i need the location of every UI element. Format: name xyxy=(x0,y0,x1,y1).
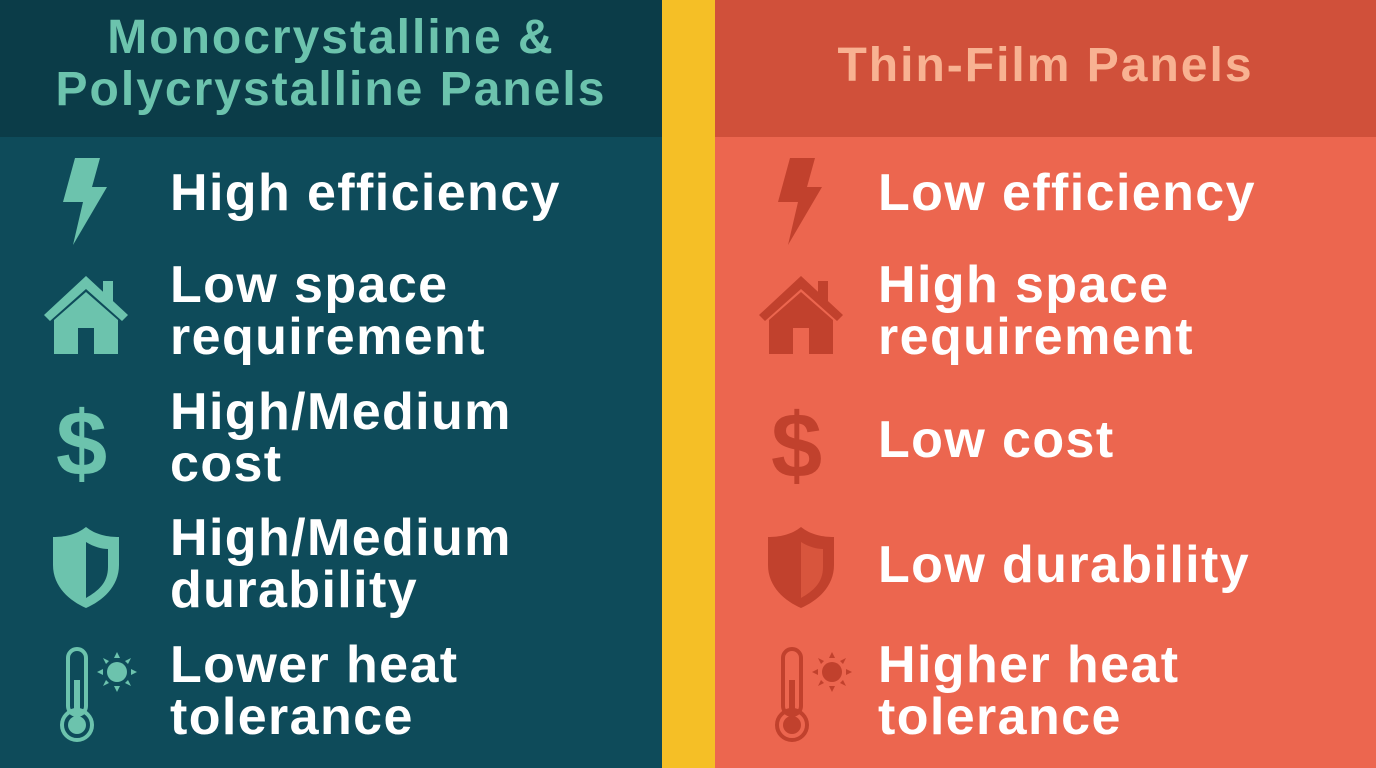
icon: dollar: $ xyxy=(56,393,107,495)
text: high space: High space xyxy=(878,256,1169,314)
text: low efficiency: Low efficiency xyxy=(878,164,1256,222)
left title xyxy=(56,11,606,116)
text: high space xyxy=(878,256,1194,366)
text: low space xyxy=(170,256,486,366)
text: cost xyxy=(170,383,512,493)
icon: thermometer sun xyxy=(60,647,137,742)
text: low cost: Low cost xyxy=(878,411,1115,469)
text: higher heat tolerance xyxy=(878,636,1179,746)
text: durability xyxy=(170,509,512,619)
text: higher heat tolerance: Higher heat xyxy=(878,636,1179,694)
text: high efficiency: High efficiency xyxy=(170,164,561,222)
text: low space: requirement xyxy=(170,308,486,366)
text: heat tolerance: tolerance xyxy=(170,688,414,746)
text: high space: requirement xyxy=(878,308,1194,366)
text: higher heat tolerance: tolerance xyxy=(878,688,1122,746)
text: heat tolerance xyxy=(170,636,458,746)
icon: house xyxy=(759,276,843,354)
right title: Thin-Film Panels xyxy=(837,39,1254,92)
right header band xyxy=(715,0,1376,137)
divider: yellow stripe xyxy=(662,0,715,768)
icon: lightning xyxy=(63,158,107,245)
icon: lightning xyxy=(778,158,822,244)
text: low durability: Low durability xyxy=(878,536,1250,594)
icon: house xyxy=(44,276,128,354)
panel: right thin-film xyxy=(715,0,1376,768)
left title: Polycrystalline Panels xyxy=(56,63,606,116)
text: cost: High/Medium xyxy=(170,383,512,441)
icon: shield xyxy=(768,527,834,608)
icon: thermometer sun xyxy=(775,647,852,742)
text: heat tolerance: Lower heat xyxy=(170,636,458,694)
text: cost: cost xyxy=(170,435,283,493)
panel: left monocrystalline xyxy=(0,0,662,768)
left title: Monocrystalline & xyxy=(107,11,555,64)
icon: shield xyxy=(53,527,119,608)
icon: dollar: $ xyxy=(771,395,822,497)
text: durability: durability xyxy=(170,561,418,619)
left header band xyxy=(0,0,662,137)
text: durability: High/Medium xyxy=(170,509,512,567)
text: low space: Low space xyxy=(170,256,448,314)
